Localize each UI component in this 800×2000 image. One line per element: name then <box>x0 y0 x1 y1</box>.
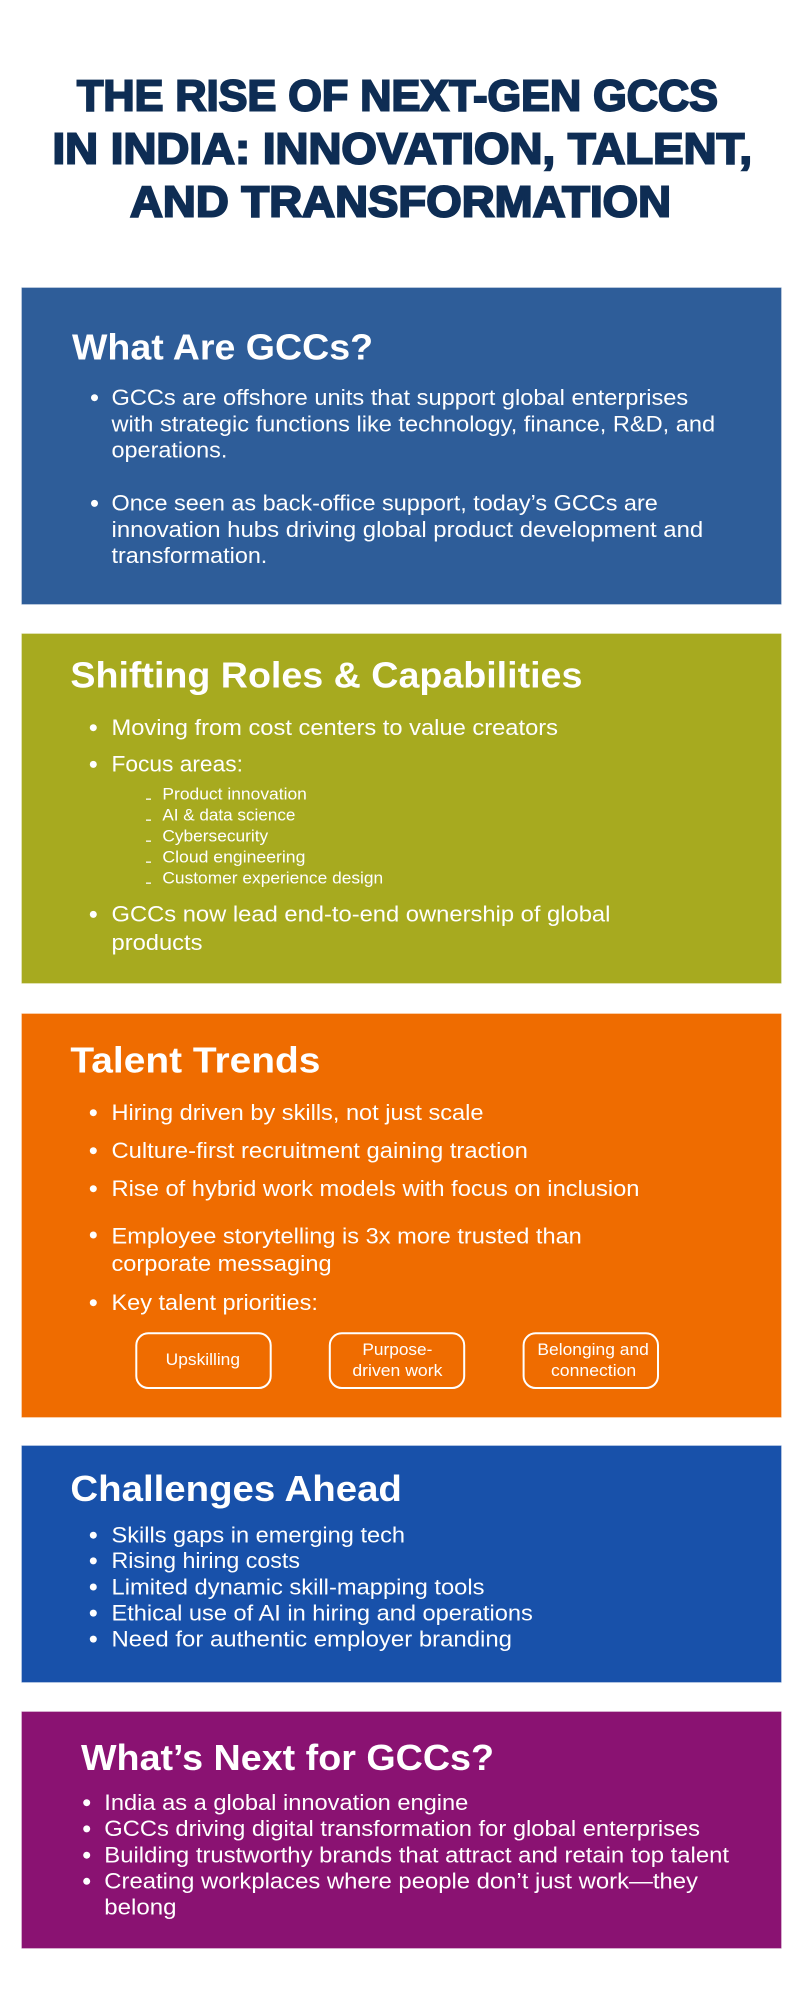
list: focus area items <box>146 785 383 887</box>
panel: What Are GCCs? <box>22 288 782 604</box>
heading: Shifting Roles & Capabilities: Shifting Roles & Capabilities <box>70 655 582 696</box>
bullet: culture-first recruitment: Culture-first recruitment gaining traction <box>112 1138 528 1163</box>
title: IN INDIA: INNOVATION, TALENT, <box>52 126 752 174</box>
text: definition of GCCs: GCCs are offshore units that support global enterprises <box>112 385 688 410</box>
callout box: Purpose-driven work: driven work <box>352 1362 443 1380</box>
callout box: Upskilling: Upskilling <box>166 1351 240 1369</box>
list: challenges: Ethical use of AI in hiring and operations <box>112 1600 533 1625</box>
text: evolution of GCCs: transformation. <box>112 543 267 568</box>
bullet: end-to-end ownership <box>90 902 610 955</box>
callout box: Belonging and connection: Belonging and <box>537 1341 649 1359</box>
callout box: Upskilling <box>136 1333 271 1388</box>
heading: Talent Trends: Talent Trends <box>70 1039 320 1080</box>
bullet: value creators: Moving from cost centers to value creators <box>112 715 558 740</box>
list: focus area items: AI & data science <box>162 806 295 824</box>
bullet: hybrid work: Rise of hybrid work models with focus on inclusion <box>112 1176 640 1201</box>
bullet: employee storytelling: corporate messaging <box>112 1251 332 1276</box>
list: challenges: Skills gaps in emerging tech <box>112 1522 405 1548</box>
heading: What's Next for GCCs?: What’s Next for GCCs? <box>81 1737 494 1778</box>
list: challenges: Need for authentic employer branding <box>112 1626 512 1651</box>
list: focus area items: Product innovation <box>162 785 307 803</box>
list: focus area items: Customer experience design <box>162 869 383 887</box>
title: THE RISE OF NEXT-GEN GCCS <box>77 72 718 120</box>
panel: Challenges Ahead <box>22 1446 782 1682</box>
list: what's next: Creating workplaces where people don’t just work—they <box>104 1869 699 1894</box>
text: definition of GCCs: with strategic functions like technology, finance, R&D, and <box>110 412 715 437</box>
text: evolution of GCCs: Once seen as back-office support, today’s GCCs are <box>112 491 658 516</box>
list: what's next <box>83 1790 730 1920</box>
bullet: employee storytelling <box>90 1223 582 1276</box>
list: challenges: Rising hiring costs <box>112 1548 300 1573</box>
text: definition of GCCs <box>91 385 715 463</box>
callout box: Belonging and connection <box>524 1333 658 1388</box>
list: challenges: Limited dynamic skill-mapping tools <box>112 1574 484 1599</box>
list: focus area items: Cloud engineering <box>162 848 305 866</box>
callout box: Purpose-driven work <box>330 1333 464 1388</box>
list: challenges <box>90 1522 533 1651</box>
title <box>52 72 752 226</box>
list: focus area items: Cybersecurity <box>162 827 269 845</box>
panel: Shifting Roles & Capabilities <box>22 634 782 984</box>
text: evolution of GCCs: innovation hubs driving global product development and <box>112 517 703 542</box>
callout box: Purpose-driven work: Purpose- <box>362 1341 432 1359</box>
bullet: end-to-end ownership: products <box>112 930 202 955</box>
list: what's next: belong <box>104 1895 176 1920</box>
text: definition of GCCs: operations. <box>112 438 227 463</box>
bullet: employee storytelling: Employee storytelling is 3x more trusted than <box>112 1223 582 1248</box>
heading: What Are GCCs?: What Are GCCs? <box>72 326 373 368</box>
title: AND TRANSFORMATION <box>130 178 671 226</box>
panel: What's Next for GCCs? <box>22 1712 782 1948</box>
list: what's next: India as a global innovation engine <box>104 1790 468 1815</box>
list: what's next: Building trustworthy brands that attract and retain top talent <box>104 1842 730 1868</box>
bullet: key talent priorities: Key talent priorities: <box>112 1290 318 1315</box>
bullet: end-to-end ownership: GCCs now lead end-to-end ownership of global <box>112 902 610 927</box>
heading: Challenges Ahead: Challenges Ahead <box>70 1468 402 1509</box>
bullet: skills hiring: Hiring driven by skills, not just scale <box>112 1100 484 1125</box>
bullet: focus areas: Focus areas: <box>112 752 243 777</box>
text: evolution of GCCs <box>91 491 703 568</box>
callout box: Belonging and connection: connection <box>551 1362 636 1380</box>
list: what's next: GCCs driving digital transformation for global enterprises <box>104 1816 700 1841</box>
panel: Talent Trends <box>22 1014 782 1418</box>
